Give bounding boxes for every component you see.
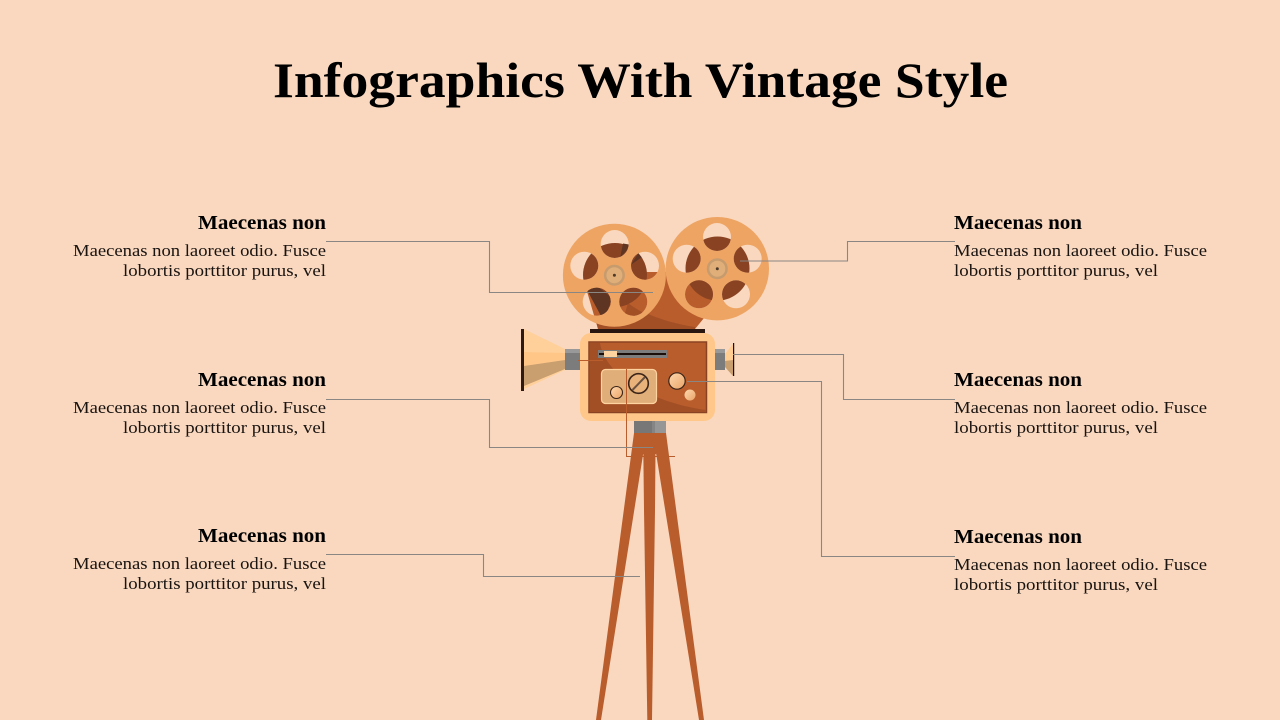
text block: top left: Maecenas non laoreet odio. Fusce <box>73 241 326 260</box>
text block: bottom left: lobortis porttitor purus, vel <box>123 574 326 593</box>
connector: bottom left <box>326 554 640 576</box>
tripod head <box>634 421 666 433</box>
text block: bottom left: Maecenas non laoreet odio. Fusce <box>73 554 326 573</box>
left lens <box>521 329 580 391</box>
connector: middle right <box>733 354 955 400</box>
camera top housing <box>586 272 704 329</box>
right film reel <box>666 217 769 320</box>
text block: top left: lobortis porttitor purus, vel <box>123 261 326 280</box>
text block: middle right: Maecenas non <box>954 369 1082 391</box>
text block: bottom right: Maecenas non laoreet odio. Fusce <box>954 555 1207 574</box>
text block: top left <box>73 212 326 280</box>
connector: middle left <box>326 400 653 448</box>
right lens <box>715 343 734 376</box>
text block: middle left: Maecenas non laoreet odio. Fusce <box>73 398 326 417</box>
orange connector lines <box>578 360 675 456</box>
top black bar <box>590 329 705 333</box>
connector: top left <box>326 242 653 292</box>
hub <box>707 258 728 279</box>
text block: top right: lobortis porttitor purus, vel <box>954 261 1158 280</box>
knobs <box>669 373 696 400</box>
text block: middle left <box>73 369 326 437</box>
text block: middle left: Maecenas non <box>198 369 326 391</box>
camera body <box>580 333 715 421</box>
connector: bottom right <box>687 382 955 556</box>
text block: bottom right <box>954 526 1207 594</box>
text block: top right: Maecenas non <box>954 212 1082 234</box>
text block: top right: Maecenas non laoreet odio. Fusce <box>954 241 1207 260</box>
tripod legs <box>596 433 704 720</box>
connector: top right <box>740 242 955 261</box>
text block: middle left: lobortis porttitor purus, vel <box>123 418 326 437</box>
text block: top right <box>954 212 1207 280</box>
text block: bottom right: lobortis porttitor purus, vel <box>954 575 1158 594</box>
text block: bottom right: Maecenas non <box>954 526 1082 548</box>
text block: middle right: Maecenas non laoreet odio. Fusce <box>954 398 1207 417</box>
text block: bottom left <box>73 525 326 593</box>
text block: top left: Maecenas non <box>198 212 326 234</box>
control pad <box>602 370 656 404</box>
hub <box>604 265 625 286</box>
left film reel <box>562 224 666 327</box>
text block: bottom left: Maecenas non <box>198 525 326 547</box>
text block: middle right <box>954 369 1207 437</box>
control slider <box>598 350 667 358</box>
text block: middle right: lobortis porttitor purus, vel <box>954 418 1158 437</box>
title: Infographics With Vintage Style <box>273 52 1008 108</box>
illustration: vintage film camera on tripod <box>521 215 770 720</box>
